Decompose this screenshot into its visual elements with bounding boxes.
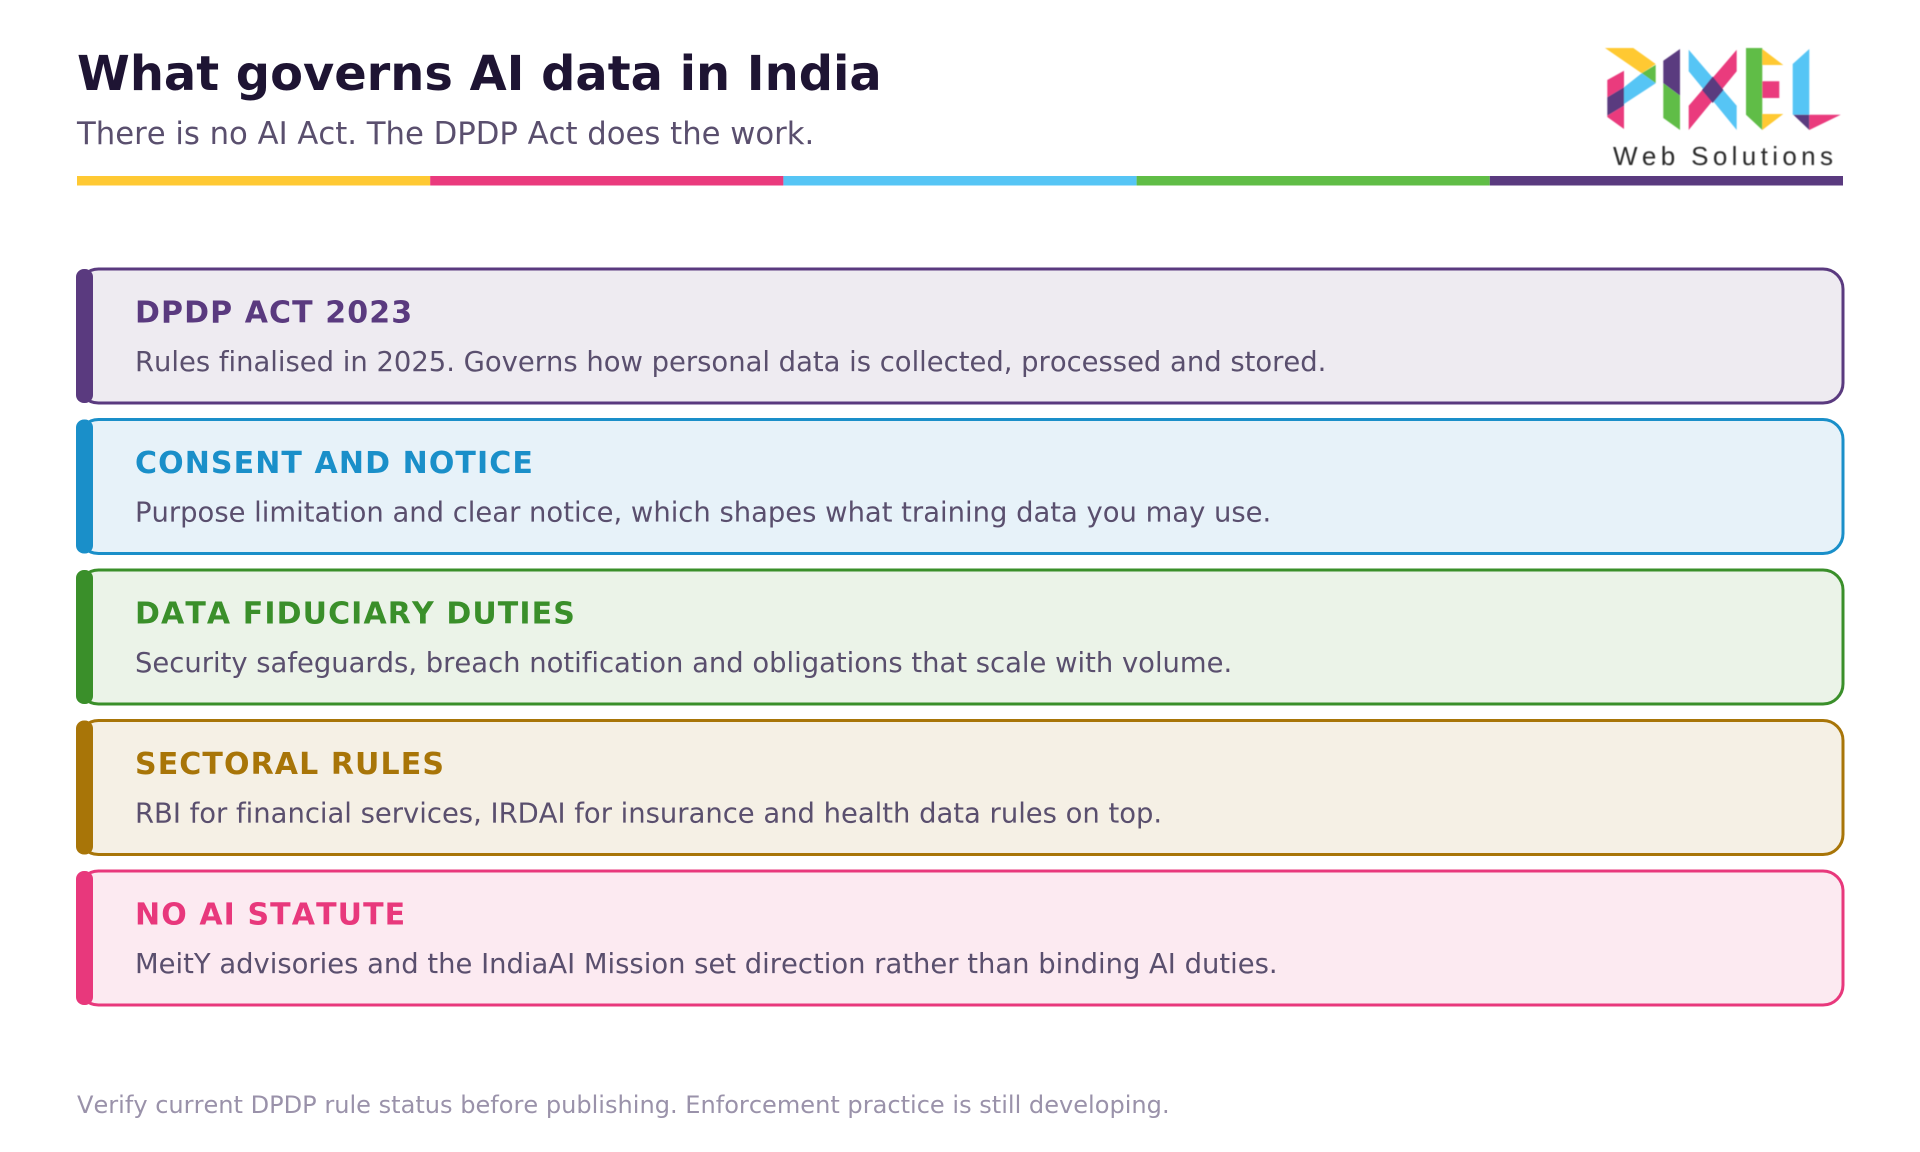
heading: no AI statute: NO AI STATUTE <box>135 898 406 932</box>
logo: Pixel Web Solutions <box>1605 48 1841 171</box>
description: consent and notice: Purpose limitation and clear notice, which shapes what training data you may use. <box>135 498 1271 528</box>
description: data fiduciary duties: Security safeguards, breach notification and obligations that scale with volume. <box>135 648 1232 679</box>
logo: Pixel Web Solutions: Web Solutions <box>1613 141 1833 171</box>
panel: DPDP Act 2023 <box>76 269 1843 403</box>
heading: consent and notice: CONSENT AND NOTICE <box>135 446 534 481</box>
description: no AI statute: MeitY advisories and the IndiaAI Mission set direction rather than binding AI duties. <box>135 949 1278 980</box>
description: DPDP Act 2023: Rules finalised in 2025. Governs how personal data is collected, processed and stored. <box>135 347 1326 378</box>
heading: sectoral rules: SECTORAL RULES <box>135 747 445 782</box>
colour bar <box>77 176 1843 186</box>
panel: no AI statute <box>76 871 1843 1005</box>
footnote: Verify current DPDP rule status before publishing. Enforcement practice is still developing. <box>77 1091 1170 1119</box>
title: What governs AI data in India <box>77 47 882 102</box>
heading: DPDP Act 2023: DPDP ACT 2023 <box>135 296 413 330</box>
heading: data fiduciary duties: DATA FIDUCIARY DUTIES <box>135 596 576 632</box>
panel: consent and notice <box>76 420 1843 554</box>
panel: data fiduciary duties <box>76 570 1843 704</box>
description: sectoral rules: RBI for financial services, IRDAI for insurance and health data rules on top. <box>135 798 1162 830</box>
panel: sectoral rules <box>76 720 1843 854</box>
subtitle: There is no AI Act. The DPDP Act does the work. <box>76 117 814 152</box>
